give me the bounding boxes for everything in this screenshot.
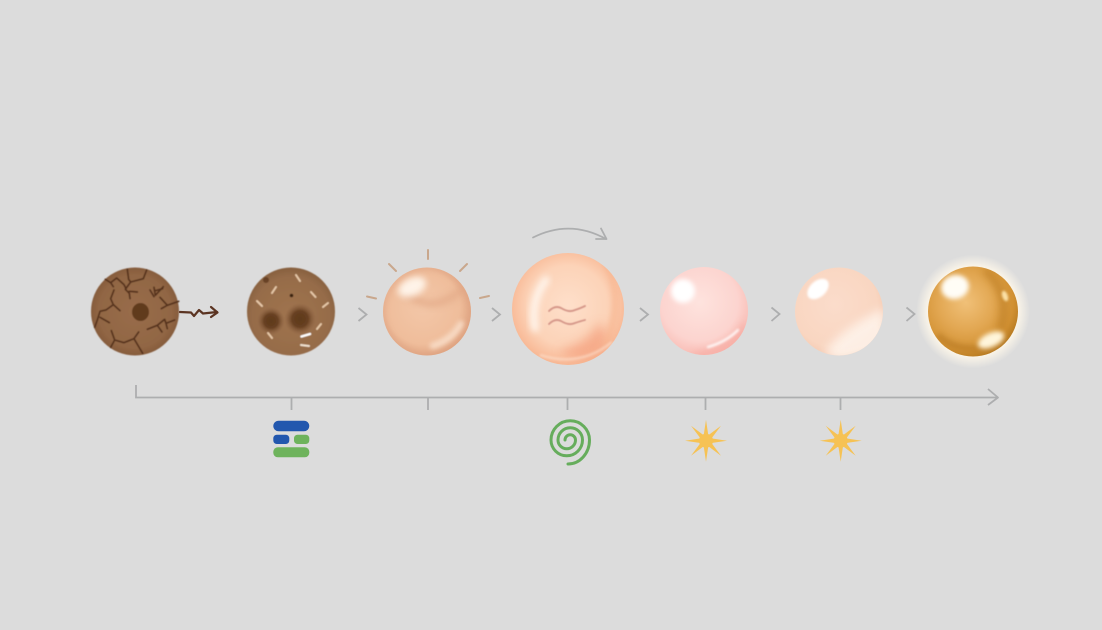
timeline ticks xyxy=(292,398,840,410)
chevron arrow 4 to 5 xyxy=(640,308,648,321)
stage 5: pink glossy skin xyxy=(660,267,750,360)
stage 4: large peach skin with wave lines xyxy=(512,253,624,365)
central dark spot xyxy=(132,303,149,321)
stage 2: spotted brown skin xyxy=(247,268,335,356)
icon: blue and green bars xyxy=(273,421,309,457)
stage 1: cracked brown skin xyxy=(91,268,179,356)
light flecks xyxy=(257,275,328,346)
cracks xyxy=(95,269,179,353)
infographic canvas xyxy=(90,228,1026,466)
timeline axis xyxy=(136,385,998,410)
chevron arrow 3 to 4 xyxy=(492,308,500,321)
arrow: jagged arrow out of stage 1 xyxy=(180,307,218,317)
icon: green spiral xyxy=(551,421,590,464)
stage 7: glowing golden skin xyxy=(920,258,1026,365)
glow halo xyxy=(916,254,1030,368)
stage 6: translucent peach skin xyxy=(795,268,883,356)
stage 3: peach skin with rays xyxy=(367,250,489,356)
wave lines xyxy=(549,306,585,324)
icon: yellow star 1 xyxy=(685,420,727,462)
dark blemishes xyxy=(257,307,285,335)
chevron arrow 6 to 7 xyxy=(906,308,914,321)
icon: yellow star 2 xyxy=(820,420,862,462)
curved arrow above stage 4 xyxy=(533,228,606,239)
rays xyxy=(367,250,489,298)
chevron arrow 5 to 6 xyxy=(772,308,780,321)
chevron arrow 2 to 3 xyxy=(358,308,366,321)
